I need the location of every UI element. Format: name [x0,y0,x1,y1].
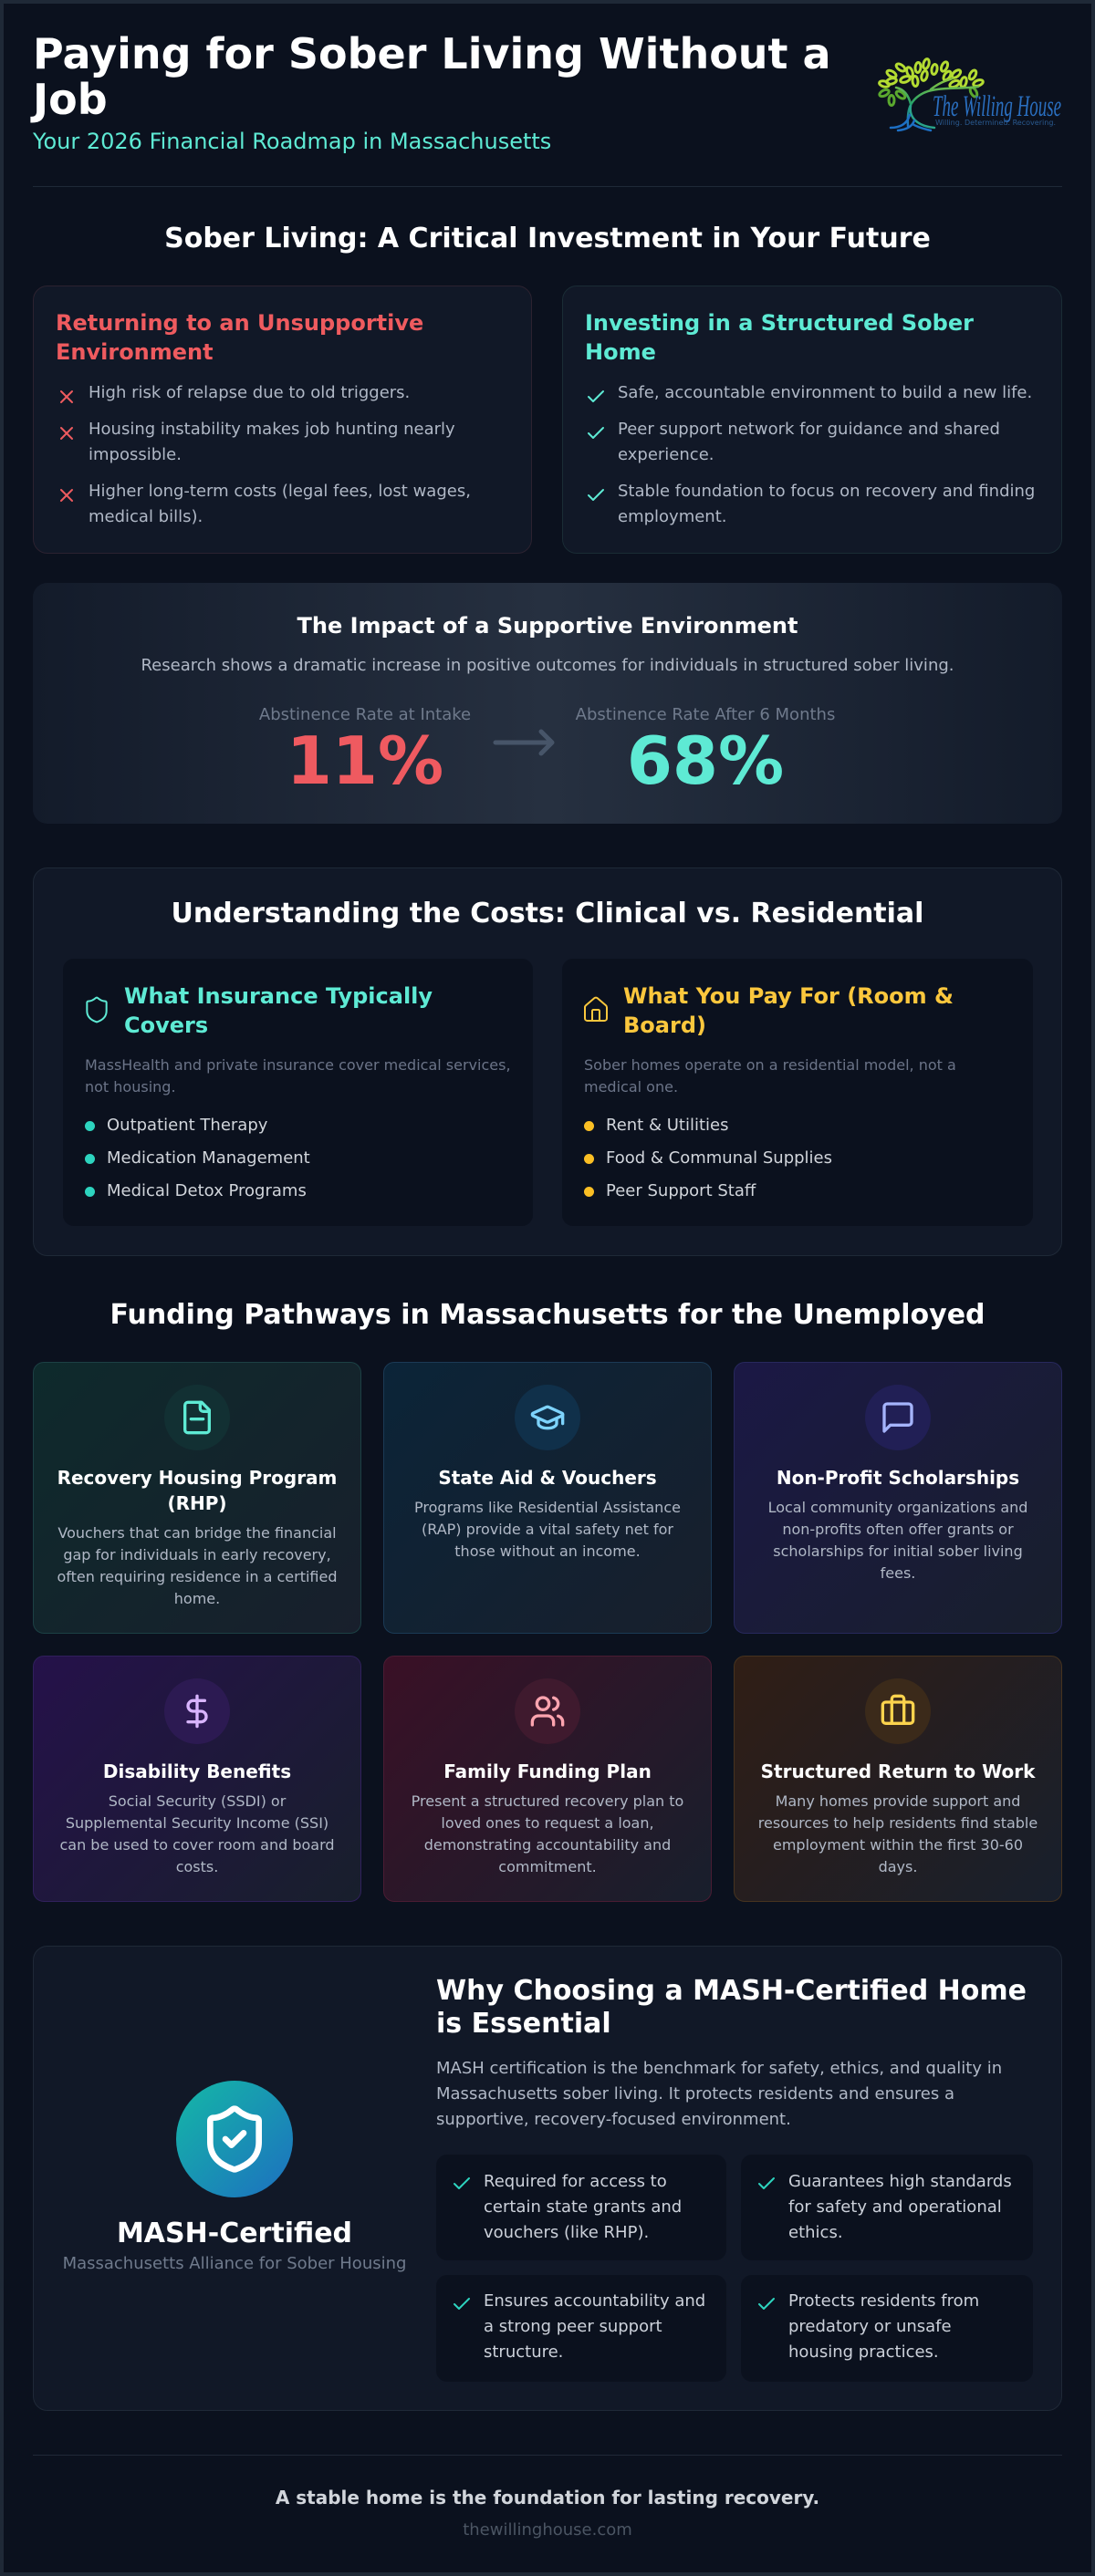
card text: days. [879,1858,917,1875]
benefit: state grants: vouchers (like RHP). [484,2223,649,2242]
card text [412,1792,683,1875]
card text: (RAP) provide a vital safety net for [422,1521,673,1538]
footer website: thewillinghouse.com [463,2520,632,2540]
card text: home. [174,1590,220,1607]
logo: The Willing House [878,57,1061,131]
card title: Non-Profit Scholarships [777,1467,1019,1489]
benefit list: employment. [618,507,726,526]
description: Massachusetts sober living. It protects residents and ensures a [436,2084,954,2103]
sub-panel description: medical one. [584,1078,678,1096]
panel: understanding the costs [33,867,1062,1256]
card text [768,1499,1027,1582]
risk list: impossible. [89,445,182,464]
heading: is Essential [436,2008,611,2040]
benefit list: Safe, accountable environment to build a new life. [618,383,1032,402]
heading [436,1975,1027,2040]
title [30,29,831,124]
benefit: high standards: Guarantees high standards [788,2172,1012,2191]
paid list [584,1116,832,1200]
sub-panel heading: What You Pay For (Room & [623,983,954,1009]
title: Job [33,75,108,124]
card title [57,1467,337,1514]
sub-panel description [85,1056,511,1096]
sub-panel: insurance covers [63,959,533,1226]
covered list [85,1116,310,1200]
risk list [60,383,471,526]
benefit: state grants: certain state grants and [484,2197,682,2217]
heading: sober living investment: Sober Living: A Critical Investment in Your Future [164,223,931,254]
benefit list: Peer support network for guidance and shared [618,420,1000,439]
description: supportive, recovery-focused environment. [436,2110,791,2129]
card text: those without an income. [454,1542,641,1560]
card text [57,1524,338,1607]
benefit: high standards: ethics. [788,2223,843,2242]
sub-panel description: MassHealth and private insurance cover medical services, [85,1056,511,1074]
panel: structured sober home [562,286,1062,554]
icon: document [164,1385,230,1450]
risk list: Housing instability makes job hunting nearly [89,420,455,439]
benefit: protects residents: predatory or unsafe [788,2317,952,2336]
sub-panel heading [623,983,954,1038]
card title: Structured Return to Work [761,1761,1035,1782]
logo: The Willing House: Willing. Determined. Recovering. [935,119,1056,127]
benefit: protects residents: housing practices. [788,2342,939,2362]
sub-panel heading: What Insurance Typically [124,983,433,1009]
sub-panel description: not housing. [85,1078,176,1096]
card text: Social Security (SSDI) or [109,1792,286,1810]
stat: after 6 months: Abstinence Rate After 6 Months [576,705,835,724]
badge title: MASH-Certified [117,2218,352,2249]
benefit: protects residents: Protects residents from [788,2291,979,2311]
icon: message [865,1385,931,1450]
card text: can be used to cover room and board [59,1836,335,1854]
card text: commitment. [498,1858,597,1875]
heading: funding pathways: Funding Pathways in Massachusetts for the Unemployed [110,1299,986,1331]
card title: (RHP) [167,1492,227,1514]
panel heading: Returning to an Unsupportive [56,310,423,336]
card: state aid and vouchers [383,1362,712,1634]
card text: Vouchers that can bridge the financial [57,1524,337,1542]
benefit list: Stable foundation to focus on recovery and finding [618,482,1035,501]
footer tagline: A stable home is the foundation for lasting recovery. [276,2487,819,2508]
card: non-profit scholarships [734,1362,1062,1634]
benefit: protects residents [741,2275,1033,2382]
benefit: accountability: a strong peer support [484,2317,662,2336]
panel description: Research shows a dramatic increase in positive outcomes for individuals in structured sober living. [141,656,954,675]
card text: Many homes provide support and [776,1792,1020,1810]
covered list: Outpatient Therapy [107,1116,267,1135]
benefit: state grants: Required for access to [484,2172,667,2191]
benefit: state grants [436,2155,726,2260]
card text: scholarships for initial sober living [773,1542,1023,1560]
arrow [493,730,555,755]
card text: resources to help residents find stable [758,1814,1038,1832]
paid list: Food & Communal Supplies [606,1148,832,1168]
panel heading: Investing in a Structured Sober [585,310,974,336]
card text: gap for individuals in early recovery, [63,1546,331,1563]
benefit: accountability [436,2275,726,2382]
paid list: Rent & Utilities [606,1116,728,1135]
subtitle: Your 2026 Financial Roadmap in Massachusetts [33,129,551,154]
card: recovery housing program [33,1362,361,1634]
risk list: High risk of relapse due to old triggers. [89,383,410,402]
card: family funding plan [383,1656,712,1902]
stat: at intake [259,705,471,799]
card text: loved ones to request a loan, [441,1814,654,1832]
card text [59,1792,335,1875]
stat: at intake: 11% [287,722,443,799]
card text: demonstrating accountability and [424,1836,671,1854]
risk list: Higher long-term costs (legal fees, lost wages, [89,482,471,501]
card text: Present a structured recovery plan to [412,1792,683,1810]
card text: fees. [881,1564,915,1582]
sub-panel heading [124,983,433,1038]
icon: graduation cap [515,1385,580,1450]
card: disability benefits [33,1656,361,1902]
stat: after 6 months [575,705,835,799]
sub-panel: what you pay for [562,959,1033,1226]
panel heading: Environment [56,339,214,365]
card: structured return to work [734,1656,1062,1902]
benefit list: experience. [618,445,714,464]
sub-panel heading: Board) [623,1013,706,1038]
panel: unsupportive environment [33,286,532,554]
card text: employment within the first 30-60 [773,1836,1023,1854]
benefit list [588,383,1035,526]
card title: State Aid & Vouchers [438,1467,657,1489]
card text: often requiring residence in a certified [57,1568,338,1585]
stat: after 6 months: 68% [627,722,784,799]
covered list: Medication Management [107,1148,310,1168]
icon: briefcase [865,1678,931,1744]
benefit: accountability: Ensures accountability and [484,2291,705,2311]
card title: Disability Benefits [103,1761,291,1782]
icon: shield check [176,2081,293,2197]
benefit: accountability: structure. [484,2342,563,2362]
card text: Local community organizations and [768,1499,1027,1516]
panel heading: The Impact of a Supportive Environment [297,613,798,639]
icon: shield [86,996,108,1023]
description: MASH certification is the benchmark for safety, ethics, and quality in [436,2059,1002,2078]
covered list: Medical Detox Programs [107,1181,307,1200]
description [436,2059,1002,2129]
benefit: high standards [741,2155,1033,2260]
icon: dollar [164,1678,230,1744]
sub-panel description: Sober homes operate on a residential model, not a [584,1056,956,1074]
card title: Family Funding Plan [443,1761,652,1782]
card text: Programs like Residential Assistance [414,1499,681,1516]
badge: MASH-certified [63,2081,406,2273]
panel heading: Home [585,339,656,365]
card text [758,1792,1038,1875]
heading: Why Choosing a MASH-Certified Home [436,1975,1027,2007]
badge subtitle: Massachusetts Alliance for Sober Housing [63,2254,406,2273]
panel: impact of a supportive environment [33,583,1062,824]
benefit: high standards: for safety and operational [788,2197,1002,2217]
panel heading [56,310,423,365]
paid list: Peer Support Staff [606,1181,756,1200]
card text: costs. [176,1858,218,1875]
card title: Recovery Housing Program [57,1467,337,1489]
icon: users [515,1678,580,1744]
card text: Supplemental Security Income (SSI) [66,1814,328,1832]
stat: at intake: Abstinence Rate at Intake [259,705,471,724]
section heading: Understanding the Costs: Clinical vs. Residential [172,898,923,930]
sub-panel heading: Covers [124,1013,208,1038]
sub-panel description [584,1056,956,1096]
panel heading [585,310,974,365]
card text: non-profits often offer grants or [782,1521,1014,1538]
card text [414,1499,681,1560]
icon: house [584,996,608,1022]
title: Paying for Sober Living Without a [33,29,831,78]
panel: MASH certification [33,1946,1062,2411]
risk list: medical bills). [89,507,203,526]
